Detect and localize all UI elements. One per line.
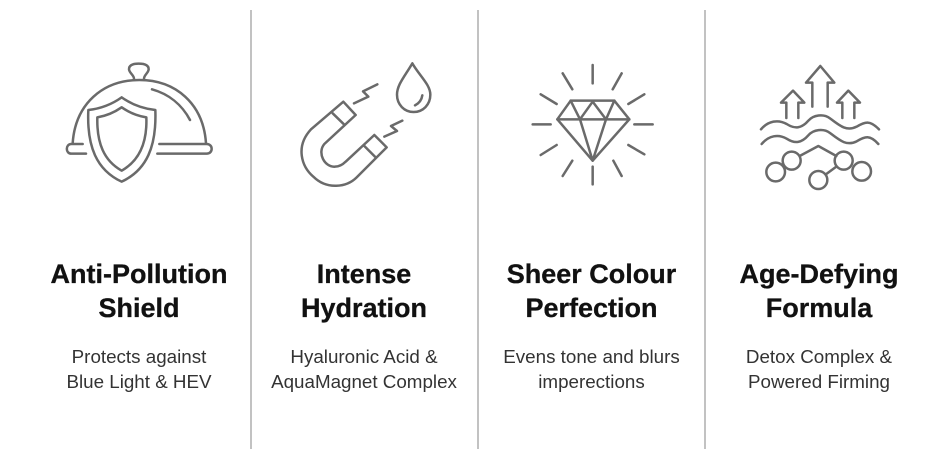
column 1 text: Shield — [98, 293, 180, 323]
column 1 text: Protects against — [72, 346, 206, 367]
column 4 text: Age-Defying — [739, 259, 898, 289]
column 3 text — [503, 259, 680, 392]
column 4 text: Detox Complex & — [746, 346, 892, 367]
column 4 text — [739, 259, 898, 392]
column 2 text: Intense — [317, 259, 411, 289]
column 3 text: Perfection — [525, 293, 658, 323]
column 1 text — [51, 259, 227, 392]
column 1 text: Blue Light & HEV — [66, 371, 212, 392]
column 4 text: Formula — [766, 293, 872, 323]
column 2 text: AquaMagnet Complex — [271, 371, 457, 392]
column 3 text: Evens tone and blurs — [503, 346, 680, 367]
column 1 text: Anti-Pollution — [51, 259, 227, 289]
column 2 text — [271, 259, 457, 392]
column 4 text: Powered Firming — [748, 371, 890, 392]
column 2 text: Hyaluronic Acid & — [290, 346, 438, 367]
column 2 text: Hydration — [301, 293, 427, 323]
column 3 text: imperections — [538, 371, 645, 392]
column 3 text: Sheer Colour — [507, 259, 676, 289]
